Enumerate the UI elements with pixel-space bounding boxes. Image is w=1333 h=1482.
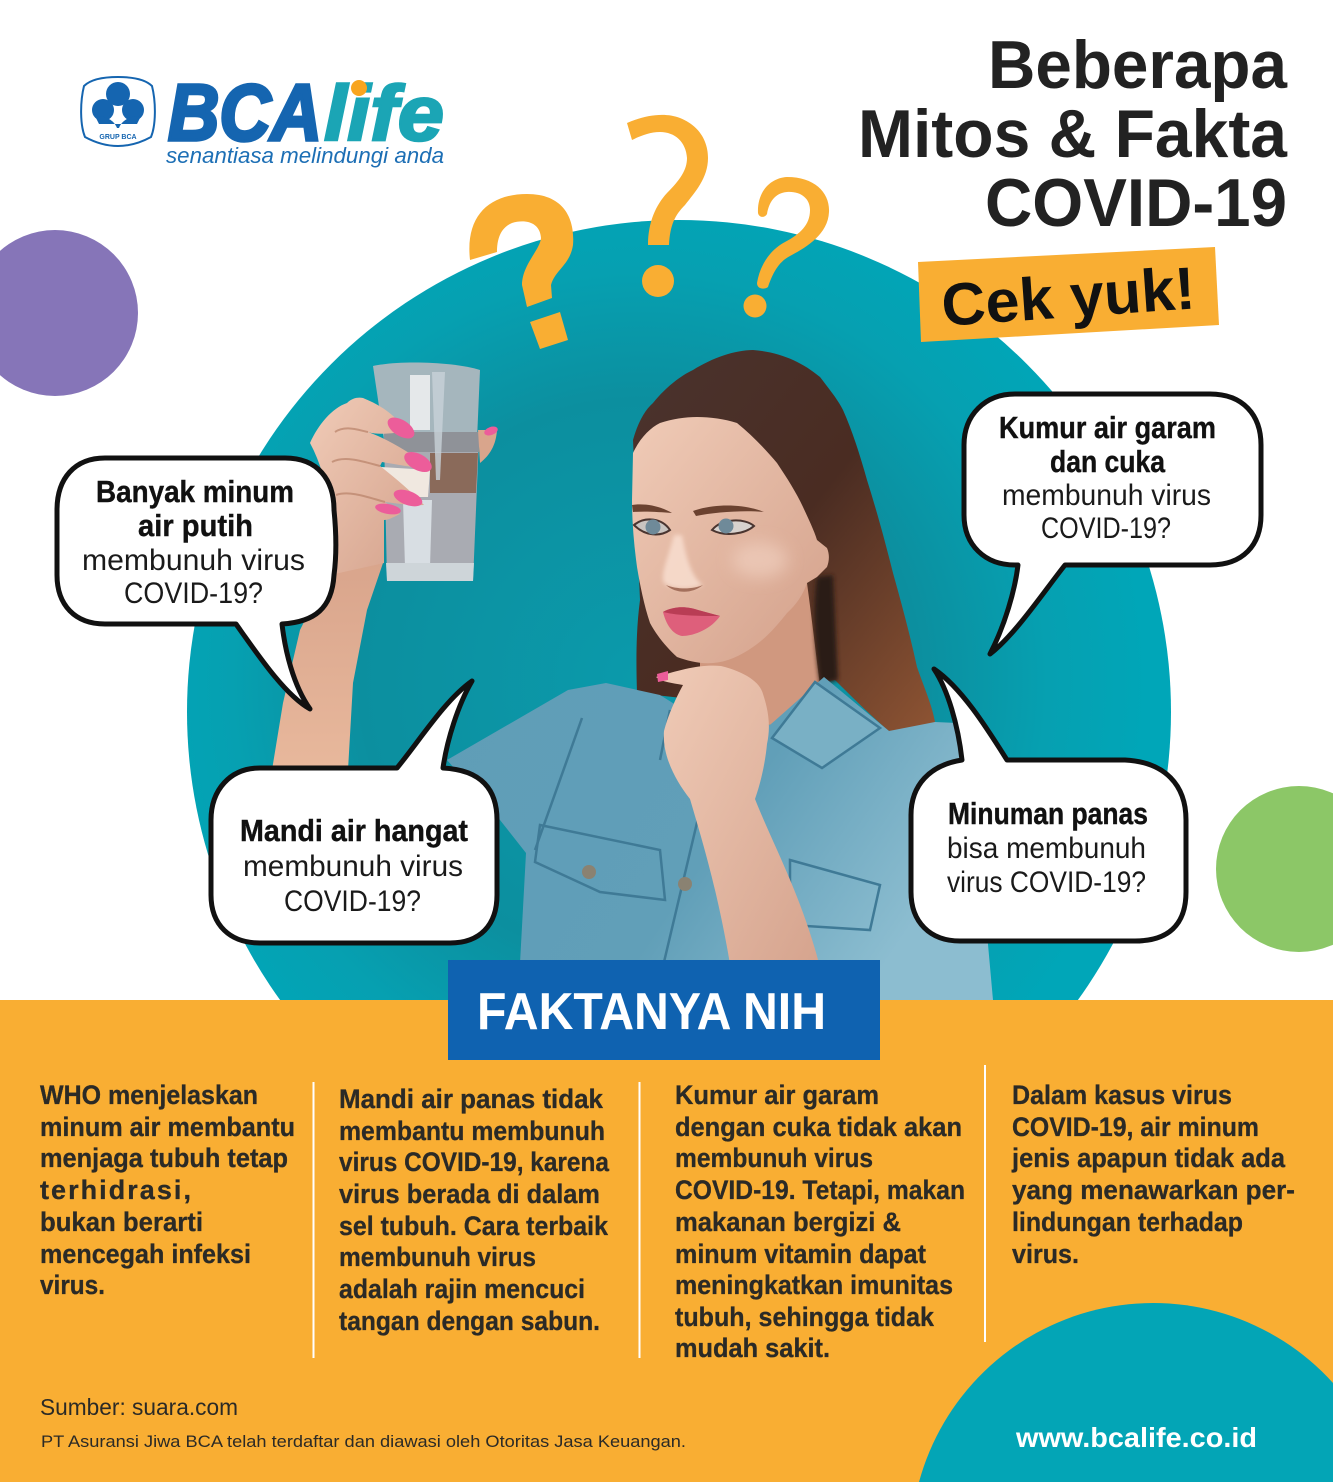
hand on chin	[656, 666, 818, 960]
fact column 4: COVID-19, air minum	[1012, 1112, 1259, 1142]
speech bubble: minum air putih: membunuh virus	[82, 544, 305, 577]
glass of water	[373, 363, 497, 581]
speech bubble: kumur air garam: Kumur air garam	[999, 410, 1216, 445]
fact column 3: Kumur air garam	[675, 1080, 879, 1110]
eyebrows	[632, 504, 764, 516]
fact column 3: dengan cuka tidak akan	[675, 1112, 962, 1142]
title: COVID-19	[985, 165, 1287, 241]
fact column 1: mencegah infeksi	[40, 1239, 251, 1269]
source line: Sumber: suara.com	[40, 1394, 238, 1420]
fact column 3: mudah sakit.	[675, 1333, 830, 1363]
fact column 3: meningkatkan imunitas	[675, 1270, 953, 1300]
fact column 1: minum air membantu	[40, 1112, 295, 1142]
speech bubble: kumur air garam	[964, 394, 1261, 654]
website url: www.bcalife.co.id	[1015, 1422, 1257, 1453]
pink nails	[374, 413, 499, 516]
fact column 4	[1011, 1080, 1295, 1269]
fact column 3: membunuh virus	[675, 1143, 873, 1173]
fact column 3: COVID-19. Tetapi, makan	[675, 1175, 965, 1205]
fact column 2: virus berada di dalam	[339, 1179, 600, 1209]
speech bubble: minuman panas: Minuman panas	[948, 796, 1148, 831]
bottom-right teal circle	[919, 1303, 1333, 1482]
speech bubble: minuman panas: bisa membunuh	[947, 832, 1146, 865]
fact column 2	[339, 1084, 610, 1336]
fact column 3: tubuh, sehingga tidak	[675, 1302, 935, 1332]
fact column 2: tangan dengan sabun.	[339, 1306, 600, 1336]
fact column 2: Mandi air panas tidak	[339, 1084, 604, 1114]
speech bubble: kumur air garam: membunuh virus	[1002, 479, 1211, 512]
callout: Cek yuk: Cek yuk!	[939, 254, 1197, 339]
fact column 3: minum vitamin dapat	[675, 1239, 926, 1269]
fact column 1: terhidrasi,	[40, 1175, 191, 1205]
speech bubble: kumur air garam: dan cuka	[1050, 444, 1166, 479]
fact column 4: lindungan terhadap	[1012, 1207, 1243, 1237]
green circle	[1216, 786, 1333, 952]
fact column 2: membantu membunuh	[339, 1116, 605, 1146]
hair	[633, 350, 935, 731]
icon: question marks	[469, 115, 829, 349]
speech bubble: minum air putih	[57, 458, 336, 709]
logo: BCA life: life	[324, 69, 444, 157]
logo emblem	[81, 77, 155, 146]
logo tagline: senantiasa melindungi anda	[166, 143, 444, 168]
fact column 4: jenis apapun tidak ada	[1011, 1143, 1286, 1173]
heading: Faktanya nih	[448, 960, 880, 1060]
speech bubble: kumur air garam: COVID-19?	[1041, 512, 1171, 545]
speech bubble: minuman panas: virus COVID-19?	[947, 866, 1146, 899]
speech bubble: minuman panas	[911, 669, 1186, 941]
logo emblem: GRUP BCA	[99, 134, 137, 141]
nose	[663, 535, 703, 589]
shirt collar and pockets	[534, 680, 882, 960]
neck	[700, 583, 820, 725]
fact column 2: virus COVID-19, karena	[339, 1147, 610, 1177]
fact column 1: WHO menjelaskan	[40, 1080, 258, 1110]
woman photo	[272, 350, 993, 1002]
purple circle	[0, 230, 138, 396]
fact column 1	[40, 1080, 295, 1300]
speech bubble: mandi air hangat: Mandi air hangat	[240, 813, 468, 848]
finger lines	[332, 428, 385, 502]
logo wordmark: BCA	[168, 68, 322, 157]
fact column 4: virus.	[1012, 1239, 1079, 1269]
title: Mitos & Fakta	[858, 96, 1288, 172]
fact column 3: makanan bergizi &	[675, 1207, 901, 1237]
disclaimer: PT Asuransi Jiwa BCA telah terdaftar dan diawasi oleh Otoritas Jasa Keuangan.	[41, 1433, 686, 1451]
raised hand	[310, 398, 430, 575]
speech bubble: mandi air hangat: membunuh virus	[243, 850, 463, 883]
fact column 2: membunuh virus	[339, 1242, 536, 1272]
fact column 1: bukan berarti	[40, 1207, 203, 1237]
speech bubble: minum air putih: air putih	[138, 508, 253, 543]
hair shadow by neck	[814, 575, 838, 685]
title	[858, 27, 1288, 241]
title: Beberapa	[988, 27, 1288, 103]
fact column 4: yang menawarkan per-	[1012, 1175, 1295, 1205]
fact column 2: adalah rajin mencuci	[339, 1274, 585, 1304]
speech bubble: minum air putih: COVID-19?	[124, 577, 263, 610]
orange facts panel	[0, 1000, 1333, 1482]
fact column 1: menjaga tubuh tetap	[40, 1143, 288, 1173]
speech bubble: minum air putih: Banyak minum	[96, 474, 294, 509]
speech bubble: mandi air hangat: COVID-19?	[284, 885, 421, 918]
fact column 3	[675, 1080, 965, 1363]
heading: Faktanya nih: FAKTANYA NIH	[477, 983, 826, 1041]
nail	[657, 671, 668, 682]
fact column 1: virus.	[40, 1270, 105, 1300]
speech bubble: mandi air hangat	[211, 681, 497, 943]
denim shirt	[447, 677, 993, 1000]
raised arm	[272, 563, 383, 770]
teal circle	[187, 220, 1171, 1000]
eyes	[634, 518, 754, 534]
fact column 4: Dalam kasus virus	[1012, 1080, 1232, 1110]
lips	[663, 607, 720, 636]
logo: BCA life	[81, 68, 444, 168]
fact column 2: sel tubuh. Cara terbaik	[339, 1211, 609, 1241]
face	[632, 417, 829, 663]
cheek highlight	[732, 542, 788, 578]
